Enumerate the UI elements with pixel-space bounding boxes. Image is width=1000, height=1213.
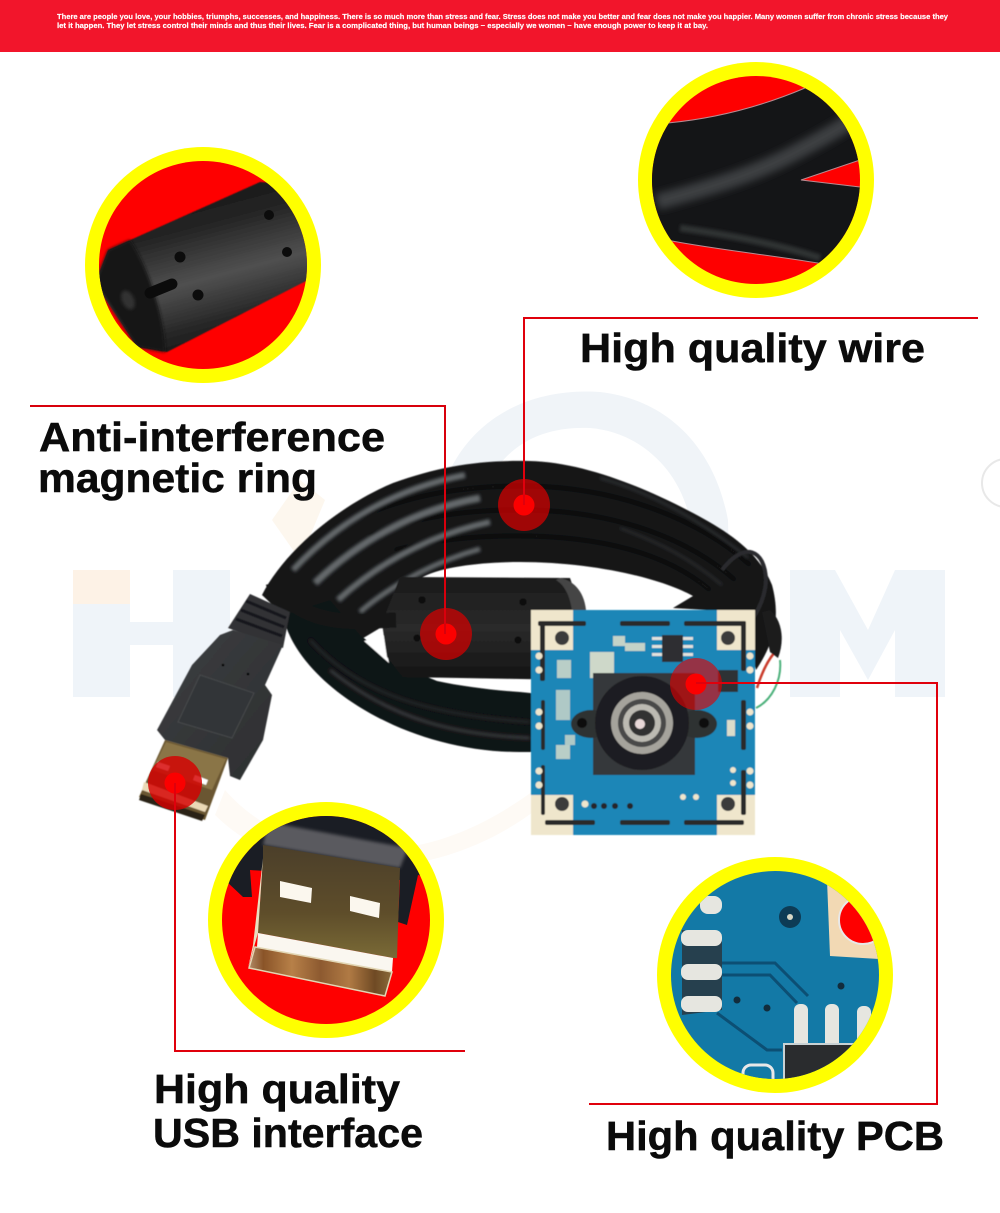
hotspot: PCB <box>670 658 722 710</box>
leader line: magnetic ring <box>30 406 445 634</box>
banner text: There are people you love, your hobbies, triumphs, successes, and happiness. There is so much more than stress and fear. Stress does not make you better and fear does not make you happier. Many women suffer from chronic stress because they <box>57 12 949 21</box>
hotspot: wire <box>498 479 550 531</box>
label: high quality USB interface <box>153 1066 423 1156</box>
leader line: USB <box>175 783 465 1051</box>
cable tie loop <box>722 552 766 640</box>
leader line: PCB <box>589 683 937 1104</box>
banner text: let it happen. They let stress control their minds and thus their lives. Fear is a complicated thing, but human beings − especially we women − have enough power to keep it at bay. <box>57 21 708 30</box>
detail circle: USB interface <box>208 802 444 1038</box>
USB plug <box>139 594 290 821</box>
label: high quality USB interface: USB interface <box>153 1110 423 1156</box>
lens <box>595 676 689 770</box>
label: anti-interference magnetic ring: Anti-interference <box>39 414 385 460</box>
banner text <box>57 12 949 30</box>
label: anti-interference magnetic ring: magnetic ring <box>38 455 317 501</box>
circuit traces <box>720 963 808 996</box>
ribbon wires <box>757 652 775 688</box>
PCB copper corners <box>531 610 755 835</box>
short cable into ring <box>268 592 396 621</box>
magnetic ring <box>382 577 586 680</box>
detail circle: PCB <box>657 850 895 1094</box>
cable coil <box>262 461 776 752</box>
lens holder <box>593 673 695 775</box>
label: anti-interference magnetic ring <box>38 414 385 501</box>
label: high quality PCB: High quality PCB <box>606 1113 944 1159</box>
PCB camera module <box>531 610 782 835</box>
detail circle: wire <box>638 60 880 298</box>
hotspot: USB <box>148 756 202 810</box>
watermark logo <box>73 392 1000 868</box>
label: high quality USB interface: High quality <box>154 1066 400 1112</box>
leader line: wire <box>524 318 978 505</box>
product photo: camera with USB cable <box>139 461 782 835</box>
label: high quality wire: High quality wire <box>580 325 925 371</box>
detail circle: magnetic ring <box>85 147 321 383</box>
hotspot: magnetic ring <box>420 608 472 660</box>
top red banner <box>0 0 1000 52</box>
PCB pads and components <box>536 636 754 808</box>
